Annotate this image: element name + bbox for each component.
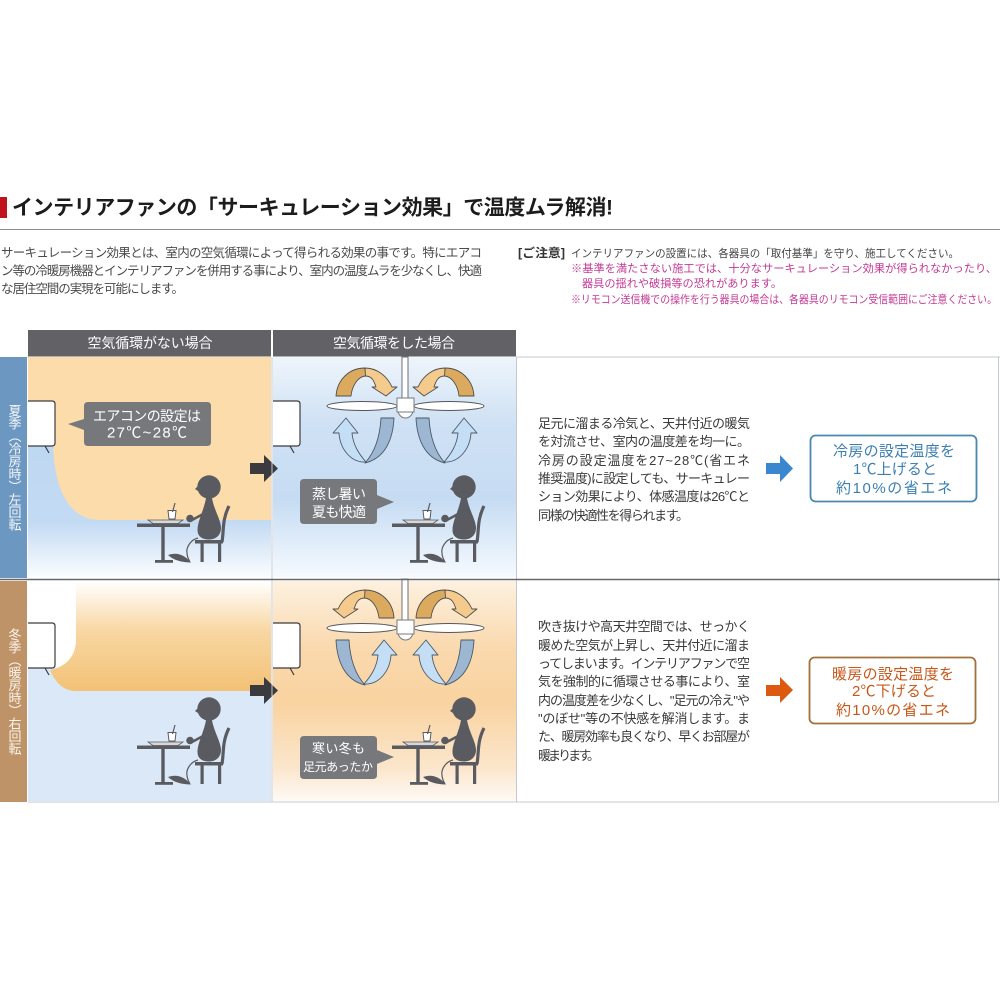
intro text: サーキュレーション効果とは、室内の空気循環によって得られる効果の事です。特にエアコ bbox=[1, 245, 482, 260]
result box: cooling: 約10%の省エネ bbox=[836, 480, 952, 497]
icon: seated person bbox=[137, 475, 229, 563]
arrow: summer result bbox=[766, 455, 793, 482]
icon: air conditioner bbox=[273, 401, 300, 453]
airflow arrows bbox=[333, 368, 477, 463]
callout: setting temperature: 27℃~28℃ bbox=[107, 424, 187, 442]
caution notes: ※基準を満たさない施工では、十分なサーキュレーション効果が得られなかったり、 bbox=[571, 261, 997, 275]
icon: air conditioner bbox=[28, 623, 55, 675]
column header: with circulation bbox=[273, 330, 516, 356]
text: winter explanation: 気を強制的に循環させる事により、室 bbox=[538, 674, 750, 689]
text: winter explanation: "のぼせ"等の不快感を解消します。ま bbox=[538, 711, 750, 726]
text: summer explanation: ション効果により、体感温度は26℃と bbox=[538, 489, 750, 504]
caution notes: 器具の揺れや破損等の恐れがあります。 bbox=[582, 276, 782, 290]
result box: heating: 暖房の設定温度を bbox=[832, 666, 954, 683]
title marker bbox=[0, 197, 7, 218]
arrow: winter comparison bbox=[250, 677, 278, 704]
text: winter explanation: 内の温度差を少なくし、"足元の冷え"や bbox=[538, 693, 750, 708]
airflow arrows bbox=[333, 590, 477, 685]
icon: seated person bbox=[392, 697, 484, 785]
column header: no circulation bbox=[28, 330, 271, 356]
text: winter explanation: た、暖房効率も良くなり、早くお部屋が bbox=[538, 729, 750, 744]
season tab: summer: 夏季（冷房時）左回転 bbox=[6, 404, 22, 533]
callout: warm feet in winter: 足元あったか bbox=[303, 760, 373, 774]
icon: seated person bbox=[137, 697, 229, 785]
callout: warm feet in winter bbox=[300, 736, 394, 779]
season tab: winter: 冬季（暖房時）右回転 bbox=[6, 627, 22, 757]
text: summer explanation: 同様の快適性を得られます。 bbox=[538, 508, 689, 523]
text: summer explanation: 推奨温度)に設定しても、サーキュレー bbox=[538, 471, 750, 486]
callout: comfort in summer: 蒸し暑い bbox=[312, 486, 366, 502]
text: winter explanation: 暖まります。 bbox=[538, 748, 600, 763]
result box: heating: 2℃下げると bbox=[852, 683, 936, 700]
icon: air conditioner bbox=[28, 401, 55, 453]
text: summer explanation: 足元に溜まる冷気と、天井付近の暖気 bbox=[538, 416, 750, 431]
text: winter explanation: 暖めた空気が上昇し、天井付近に溜ま bbox=[538, 638, 750, 653]
callout: setting temperature: エアコンの設定は bbox=[93, 408, 201, 424]
season tab: winter bbox=[0, 581, 27, 802]
column header: with circulation: 空気循環をした場合 bbox=[333, 335, 455, 351]
callout: comfort in summer: 夏も快適 bbox=[312, 504, 366, 520]
result box: cooling: 冷房の設定温度を bbox=[833, 443, 955, 460]
text: winter explanation: 吹き抜けや高天井空間では、せっかく bbox=[538, 619, 750, 634]
text: winter explanation: ってしまいます。インテリアファンで空 bbox=[538, 656, 750, 671]
result box: cooling: 1℃上げると bbox=[853, 461, 937, 478]
text: summer explanation: 冷房の設定温度を27~28℃(省エネ bbox=[538, 453, 750, 468]
caution notes: インテリアファンの設置には、各器具の「取付基準」を守り、施工してください。 bbox=[571, 246, 959, 260]
text: winter explanation bbox=[538, 619, 750, 763]
panel: winter without circulation bbox=[28, 581, 271, 801]
result box: heating: 約10%の省エネ bbox=[836, 702, 950, 719]
callout: setting temperature bbox=[68, 402, 211, 446]
icon: air conditioner bbox=[273, 623, 300, 675]
column header: no circulation: 空気循環がない場合 bbox=[88, 335, 212, 351]
text: summer explanation bbox=[538, 416, 750, 523]
result box: heating bbox=[810, 658, 976, 724]
arrow: winter result bbox=[766, 677, 793, 703]
callout: warm feet in winter: 寒い冬も bbox=[312, 741, 365, 756]
icon: ceiling fan bbox=[327, 579, 484, 640]
panel: summer with circulation bbox=[273, 357, 516, 577]
intro text bbox=[1, 245, 482, 296]
icon: seated person bbox=[392, 475, 484, 563]
arrow: summer comparison bbox=[250, 455, 278, 482]
season tab: summer bbox=[0, 357, 27, 578]
panel: winter with circulation bbox=[273, 579, 516, 801]
warm air region bbox=[28, 357, 271, 520]
text: summer explanation: を対流させ、室内の温度差を均一に。 bbox=[538, 434, 750, 449]
callout: comfort in summer bbox=[300, 479, 394, 524]
title: インテリアファンの「サーキュレーション効果」で温度ムラ解消! bbox=[12, 196, 613, 220]
panel: summer without circulation bbox=[28, 357, 271, 577]
caution notes bbox=[518, 245, 997, 306]
intro text: ン等の冷暖房機器とインテリアファンを併用する事により、室内の温度ムラを少なくし、快適 bbox=[1, 263, 482, 278]
result box: cooling bbox=[810, 436, 976, 502]
caution notes: [ご注意] bbox=[518, 245, 565, 260]
warm air region bbox=[50, 581, 271, 691]
intro text: な居住空間の実現を可能にします。 bbox=[1, 281, 184, 296]
icon: ceiling fan bbox=[327, 357, 484, 418]
